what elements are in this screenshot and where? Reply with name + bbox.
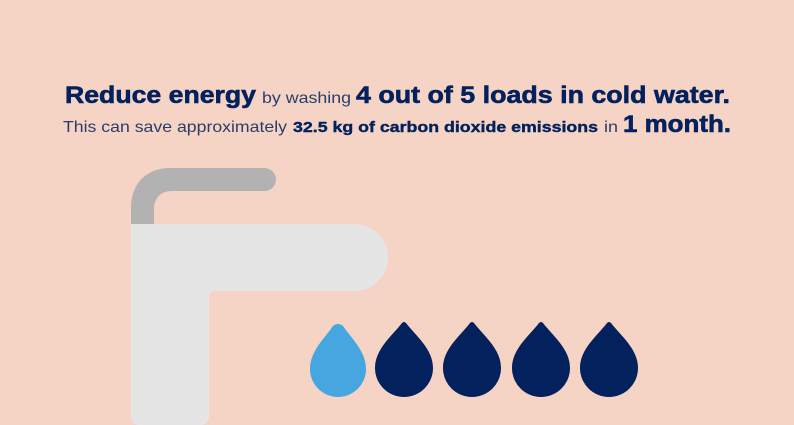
headline: reduce energy [65,82,730,109]
drop: navy 2 [443,322,501,397]
drop: navy 1 [375,322,433,397]
subheading: carbon dioxide savings: 32.5 kg of carbon dioxide emissions [293,119,598,136]
headline: reduce energy: 4 out of 5 loads in cold water. [356,82,730,109]
icon: faucet [131,168,388,425]
subheading: carbon dioxide savings: This can save approximately [63,119,287,136]
headline: reduce energy: by washing [262,90,351,107]
faucet body [131,224,388,425]
drop: navy 3 [512,322,570,397]
drop: navy 4 [580,322,638,397]
subheading: carbon dioxide savings: 1 month. [623,111,731,138]
water drops: 1 warm out of 5 loads [310,322,638,397]
headline: reduce energy: Reduce energy [65,82,257,109]
subheading: carbon dioxide savings: in [604,119,618,136]
faucet handle [131,168,276,224]
drop: light blue [310,324,366,397]
subheading: carbon dioxide savings [63,111,731,138]
